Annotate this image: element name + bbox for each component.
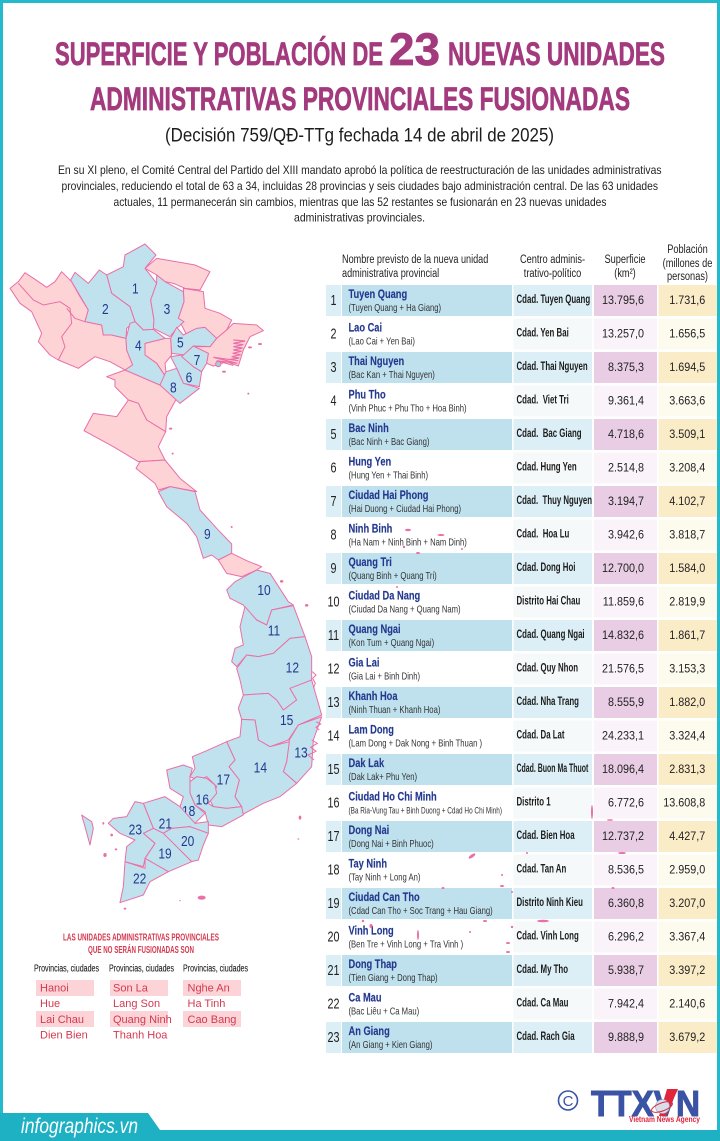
legend column 2 [109,964,174,1042]
map of Vietnam [10,244,322,910]
row 16: 13.608,8 [663,797,705,810]
row 13: (Ninh Thuan + Khanh Hoa) [348,704,440,715]
table header: (millones de [663,257,712,270]
row 22: 2.140,6 [669,998,705,1011]
row 22: (Bac Liêu + Ca Mau) [348,1006,419,1017]
legend column 2: Thanh Hoa [113,1030,168,1042]
footer band [0,1113,720,1141]
row 18: Cdad. Tan An [516,863,566,876]
row 2: 13.257,0 [602,328,644,341]
row 19: Distrito Ninh Kieu [516,897,583,910]
row 10 [328,586,717,618]
row 23: 9.888,9 [608,1032,644,1044]
row 17: Cdad. Bien Hoa [516,830,575,843]
region 19 [143,828,192,872]
row 18: (Tay Ninh + Long An) [348,872,421,883]
region 21: 21 [159,815,172,832]
region 10 [227,570,293,625]
row 22: 22 [328,995,339,1012]
row 1: 13.795,6 [602,295,644,307]
row 4: 4 [330,392,337,409]
title [55,24,665,117]
row 21: Cdad. My Tho [516,964,568,977]
row 10: 10 [328,593,339,610]
row 9: 12.700,0 [602,563,644,575]
row 3: Cdad. Thai Nguyen [516,361,588,374]
row 22 [328,988,717,1020]
row 20: 3.367,4 [669,931,706,944]
row 6: Cdad. Hung Yen [516,461,577,474]
row 16: 6.772,6 [608,797,644,810]
row 21: Dong Thap [348,958,397,971]
row 8: 3.942,6 [608,529,644,542]
row 2: Cdad. Yen Bai [516,327,569,340]
row 6: (Hung Yen + Thai Binh) [348,470,428,481]
row 6: 2.514,8 [608,462,644,475]
region 16: 16 [196,791,209,808]
row 12: (Gia Lai + Binh Dinh) [348,671,420,682]
row 17: Dong Nai [348,824,389,837]
table header: Nombre previsto de la nueva unidad [342,253,488,266]
row 12: Cdad. Quy Nhon [516,662,578,675]
offshore islands [362,529,626,953]
row 4: Phu Tho [348,388,386,402]
row 12: 3.153,3 [669,663,705,676]
row 20: 6.296,2 [608,931,644,944]
region 12 [237,637,312,710]
region 2 [71,270,135,338]
row 22: Ca Mau [348,991,382,1005]
logo: TTXVN: Vietnam News Agency [629,1114,700,1124]
row 7: Cdad. Thuy Nguyen [516,495,592,508]
row 14: (Lam Dong + Dak Nong + Binh Thuan ) [348,738,482,749]
row 9 [326,553,717,584]
map: south regions [82,553,322,910]
row 10: Distrito Hai Chau [516,595,580,608]
unmerged provinces north [10,258,263,492]
row 18: 8.536,5 [608,864,644,877]
row 3: Thai Nguyen [348,355,404,368]
legend column 1: Hue [40,998,60,1010]
intro text: administrativas provinciales. [294,210,425,224]
row 7: (Hai Duong + Ciudad Hai Phong) [348,503,461,514]
row 3 [326,352,717,383]
row 13 [326,687,717,718]
table header: trativo-político [524,267,581,280]
copyright symbol: C [563,1093,574,1110]
row 5: 3.509,1 [669,429,705,441]
row 2: 1.656,5 [669,328,705,341]
legend column 3: Cao Bang [188,1014,236,1026]
row 8 [330,520,717,550]
row 19 [326,888,717,919]
legend column 2: Provincias, ciudades [109,964,174,974]
row 13: Khanh Hoa [348,690,398,703]
legend column 1: Lai Chau [40,1014,84,1026]
legend heading: QUE NO SERÁN FUSIONADAS SON [88,943,194,956]
table header: personas) [667,270,708,283]
region 4 [125,322,167,385]
row 23: (An Giang + Kien Giang) [348,1039,432,1050]
title: 23 [389,24,440,75]
row 6: 3.208,4 [669,462,706,475]
row 5: 4.718,6 [608,429,644,441]
row 17: 17 [328,827,339,844]
region 17: 17 [217,771,230,788]
row 13: 8.555,9 [608,697,644,709]
region 20 [163,827,208,862]
legend column 1: Dien Bien [40,1030,88,1042]
row 11: 11 [328,626,339,643]
row 12: Gia Lai [348,656,379,670]
row 20: Vinh Long [348,924,394,938]
row 11: Quang Ngai [348,623,401,636]
title: SUPERFICIE Y POBLACIÓN DE [55,36,383,72]
row 2: Lao Cai [348,321,382,335]
row 3: (Bac Kan + Thai Nguyen) [348,369,435,380]
region 6: 6 [186,369,192,386]
region 10: 10 [257,582,271,598]
row 23: 3.679,2 [669,1032,705,1044]
row 11: 14.832,6 [602,630,644,642]
row 1: Tuyen Quang [348,288,407,301]
row 15: 18.096,4 [602,764,645,776]
row 9: 1.584,0 [669,563,705,575]
row 22: Cdad. Ca Mau [516,997,568,1010]
region 15: 15 [280,712,293,728]
row 18: 18 [328,861,339,878]
row 21: 5.938,7 [608,965,644,977]
row 2: (Lao Cai + Yen Bai) [348,336,415,347]
row 16: Distrito 1 [516,796,551,809]
row 1: Cdad. Tuyen Quang [516,294,590,307]
region 8: 8 [170,379,177,396]
legend column 2: Quang Ninh [113,1014,172,1026]
row 20: 20 [328,928,339,945]
row 3: 3 [330,358,337,375]
region 2: 2 [102,301,109,317]
row 18: Tay Ninh [348,857,387,871]
region 6 [171,355,202,387]
footer band: infographics.vn [21,1115,138,1138]
region 23: 23 [129,821,142,838]
legend column 3: Ha Tinh [188,998,225,1010]
legend: provinces that will not merge [34,932,248,1042]
row 13: Cdad. Nha Trang [516,696,579,709]
row 11: Cdad. Quang Ngai [516,629,585,642]
table header: administrativa provincial [342,267,439,280]
row 1: 1 [330,291,337,308]
row 17: (Dong Nai + Binh Phuoc) [348,838,434,849]
row 9: 9 [330,559,337,576]
row 8: 8 [330,526,337,543]
map: north and centre regions [10,244,263,560]
row 14: Lam Dong [348,723,394,737]
row 13: 1.882,0 [669,697,705,709]
Phu Quoc island [82,815,93,845]
row 10: (Ciudad Da Nang + Quang Nam) [348,604,461,615]
region 9: 9 [204,526,211,542]
row 15 [326,754,717,785]
table header: Superficie [604,253,646,266]
row 15: Cdad. Buon Ma Thuot [516,762,589,776]
row 6 [330,452,717,484]
merged provinces north [71,244,232,560]
row 4: Cdad. Viet Tri [516,394,569,407]
legend column 2: Son La [113,982,149,994]
intro text: actuales, 11 permanecerán sin cambios, mientras que las 52 restantes se fusionarán en 23 nuevas unidades [114,195,606,209]
logo: TTXVN: TTXVN [591,1083,700,1124]
row 15: 15 [328,760,339,777]
row 23: An Giang [348,1025,390,1038]
row 19: Ciudad Can Tho [348,891,420,904]
row 19: 6.360,8 [608,898,644,910]
subtitle: (Decisión 759/QĐ-TTg fechada 14 de abril de 2025) [165,126,554,146]
row 2: 2 [330,325,337,342]
row 18 [328,854,717,886]
row 5: (Bac Ninh + Bac Giang) [348,436,429,447]
row 16 [328,788,717,818]
region 3: 3 [164,301,170,317]
row 9: Quang Tri [348,556,392,569]
row 8: Cdad. Hoa Lu [516,528,569,541]
region 13 [283,717,322,783]
table header [342,243,712,283]
region 19: 19 [158,845,172,862]
row 8: (Ha Nam + Ninh Binh + Nam Dinh) [348,537,467,548]
row 15: 2.831,3 [669,764,705,776]
row 21: 3.397,2 [669,965,705,977]
row 12: 21.576,5 [602,663,644,676]
row 14: 14 [328,727,339,744]
table [326,285,717,1053]
region 16 [190,777,243,827]
row 8: 3.818,7 [669,529,705,542]
row 20 [328,922,717,952]
legend heading: LAS UNIDADES ADMINISTRATIVAS PROVINCIALES [63,932,219,944]
legend column 2: Lang Son [113,998,160,1010]
row 17: 4.427,7 [669,831,705,843]
region 1 [107,244,157,330]
region 7: 7 [194,352,200,368]
row 8: Ninh Binh [348,522,392,536]
Khanh Hoa coast islands [308,672,321,760]
region 17 [190,742,242,808]
region 1: 1 [132,280,139,297]
row 7: 7 [330,492,337,509]
region 21 [143,797,208,833]
region 18 [167,765,205,823]
region 20: 20 [181,833,195,849]
region 15 [238,680,322,747]
region 8 [160,368,199,403]
row 1: 1.731,6 [669,295,705,307]
table header: Población [667,243,708,256]
row 13: 13 [328,693,339,710]
row 9: (Quang Binh + Quang Tri) [348,570,437,581]
row 23: 23 [328,1028,339,1045]
row 16: Ciudad Ho Chi Minh [348,790,437,804]
row 6: Hung Yen [348,455,391,469]
row 16: (Ba Ria-Vung Tau + Binh Duong + Cdad Ho Chi Minh) [348,805,502,816]
table header: (km²) [614,267,636,280]
region 3 [151,275,184,337]
region 5: 5 [177,334,184,351]
region 14: 14 [254,759,267,776]
row 4 [330,386,717,416]
row 23 [326,1022,717,1053]
row 10: 11.859,6 [603,596,644,609]
row 14 [328,720,717,752]
row 21: (Tien Giang + Dong Thap) [348,972,438,983]
row 7: Ciudad Hai Phong [348,489,428,502]
row 11 [326,620,717,651]
row 17: 12.737,2 [602,831,644,843]
legend column 1: Provincias, ciudades [34,964,99,974]
row 14: 24.233,1 [602,730,644,743]
legend column 1 [34,964,99,1042]
Ha Long bay islands [213,340,245,365]
row 14: Cdad. Da Lat [516,729,565,742]
row 21: 21 [328,961,339,978]
Lai Chau and Dien Bien boundaries [18,283,85,360]
row 11: (Kon Tum + Quang Ngai) [348,637,434,648]
Hue [218,553,262,577]
row 12 [328,654,717,684]
legend column 3 [183,964,248,1027]
row 4: 3.663,6 [669,395,705,408]
row 20: Cdad. Vinh Long [516,930,579,943]
row 11: 1.861,7 [669,630,705,642]
row 20: (Ben Tre + Vinh Long + Tra Vinh ) [348,939,463,950]
row 6: 6 [330,459,337,476]
row 15: Dak Lak [348,757,384,770]
row 18: 2.959,0 [669,864,705,877]
row 21 [326,955,717,986]
legend column 1: Hanoi [40,982,69,994]
row 5: 5 [330,425,337,442]
row 19: 19 [328,894,339,911]
region 23 [108,802,155,867]
region 11: 11 [268,622,280,639]
region 12: 12 [286,659,299,676]
region 9 [158,487,232,560]
row 14: 3.324,4 [669,730,706,743]
row 12: 12 [328,660,339,677]
region 11 [232,606,305,667]
row 4: (Vinh Phuc + Phu Tho + Hoa Binh) [348,403,467,414]
row 23: Cdad. Rach Gia [516,1031,575,1044]
row 1: (Tuyen Quang + Ha Giang) [348,302,441,313]
row 5 [326,419,717,450]
region 22 [120,858,168,903]
region 22: 22 [133,870,146,887]
row 7: 4.102,7 [669,496,705,508]
row 22: 7.942,4 [608,998,645,1011]
row 17 [326,821,717,852]
region 5 [171,327,217,355]
region 13: 13 [294,744,308,761]
table header: Centro adminis- [520,253,585,266]
intro text [58,163,662,224]
row 2 [330,318,717,350]
row 10: Ciudad Da Nang [348,589,420,603]
row 16: 16 [328,794,339,811]
row 19: 3.207,0 [669,898,705,910]
region 4: 4 [135,337,142,354]
row 5: Bac Ninh [348,422,389,435]
row 3: 1.694,5 [669,362,705,374]
row 4: 9.361,4 [608,395,645,408]
row 19: (Cdad Can Tho + Soc Trang + Hau Giang) [348,905,493,916]
legend heading [63,932,219,956]
row 3: 8.375,3 [608,362,644,374]
region 7 [182,346,208,372]
legend column 3: Nghe An [188,982,230,994]
row 7: 3.194,7 [608,496,644,508]
row 9: Cdad. Dong Hoi [516,562,576,575]
row 15: (Dak Lak+ Phu Yen) [348,771,417,782]
region 18: 18 [182,803,195,819]
row 10: 2.819,9 [669,596,705,609]
row 1 [326,285,717,316]
legend column 3: Provincias, ciudades [183,964,248,974]
row 7 [326,486,717,517]
region 14 [227,719,297,815]
copyright symbol [558,1091,578,1110]
row 5: Cdad. Bac Giang [516,428,582,441]
